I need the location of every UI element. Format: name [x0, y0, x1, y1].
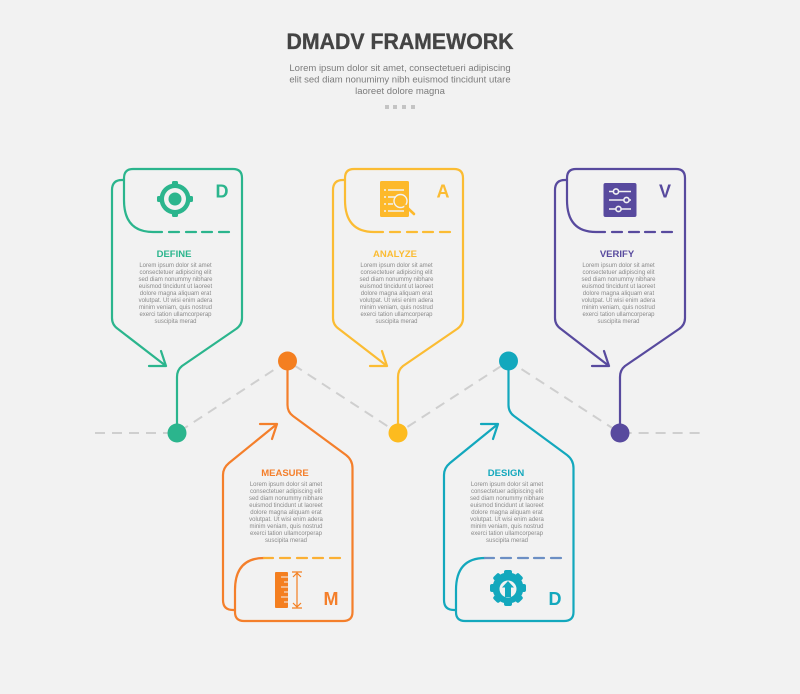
subtitle text block: elit sed diam nonumimy nibh euismod tincidunt utare — [289, 74, 511, 86]
panel: design — [444, 352, 574, 621]
icon: document with magnifier — [380, 181, 414, 217]
text block: design: volutpat. Ut wisi enim adera — [470, 517, 545, 523]
panel: verify — [555, 169, 685, 442]
dashes: design — [485, 557, 561, 559]
card outline: design — [444, 361, 574, 621]
text block: design: dolore magna aliquam erat — [471, 510, 543, 516]
title: DMADV FRAMEWORK — [286, 29, 514, 54]
card outline: verify — [555, 169, 685, 433]
card outline: measure — [223, 361, 352, 621]
heading: measure: MEASURE — [261, 468, 309, 479]
panel: measure — [223, 352, 352, 621]
text block: design: sed diam nonummy nibhare — [470, 496, 545, 502]
text block: define: euismod tincidunt ut laoreet — [139, 284, 213, 290]
text block: define: sed diam nonummy nibhare — [138, 277, 213, 283]
timeline dot: define — [168, 424, 186, 442]
text block: analyze: dolore magna aliquam erat — [361, 291, 433, 297]
text block: analyze: sed diam nonummy nibhare — [359, 277, 434, 283]
text block: analyze: Lorem ipsum dolor sit amet — [360, 263, 433, 269]
text block: verify: exerci tation ullamcorperap — [582, 312, 655, 318]
dashes: measure — [264, 557, 340, 559]
timeline dot: measure — [278, 352, 297, 370]
text block: define: volutpat. Ut wisi enim adera — [139, 298, 213, 304]
dashed timeline — [95, 361, 700, 433]
text block: verify: volutpat. Ut wisi enim adera — [582, 298, 656, 304]
text block: define: consectetuer adipiscing elit — [139, 270, 212, 276]
text block: measure: exerci tation ullamcorperap — [250, 531, 323, 537]
heading: design: DESIGN — [488, 468, 524, 479]
text block: verify: minim veniam, quis nostrud — [582, 305, 655, 311]
icon: ruler — [275, 572, 302, 608]
text block: verify: consectetuer adipiscing elit — [582, 270, 655, 276]
heading: analyze: ANALYZE — [373, 249, 417, 260]
text block: define: dolore magna aliquam erat — [140, 291, 212, 297]
text block: analyze: euismod tincidunt ut laoreet — [360, 284, 434, 290]
subtitle text block: Lorem ipsum dolor sit amet, consectetueri adipiscing — [289, 63, 511, 74]
icon: gear with up arrow — [490, 570, 526, 606]
text block: design: consectetuer adipiscing elit — [471, 489, 543, 495]
text block: measure: Lorem ipsum dolor sit amet — [250, 482, 323, 488]
text block: verify: suscipita merad — [597, 319, 640, 325]
text block: verify — [581, 263, 656, 325]
title dots — [385, 105, 415, 109]
text block: measure: euismod tincidunt ut laoreet — [249, 503, 323, 509]
subtitle text block — [289, 63, 511, 97]
text block: measure: minim veniam, quis nostrud — [249, 524, 323, 530]
timeline dot: design — [499, 352, 518, 370]
text block: analyze: minim veniam, quis nostrud — [360, 305, 433, 311]
text block: design: suscipita merad — [486, 538, 528, 544]
panel: analyze — [333, 169, 463, 442]
timeline dot: analyze — [388, 424, 408, 442]
text block: design: euismod tincidunt ut laoreet — [470, 503, 544, 509]
text block: measure: sed diam nonummy nibhare — [249, 496, 324, 502]
text block: verify: euismod tincidunt ut laoreet — [582, 284, 656, 290]
heading: verify: VERIFY — [600, 249, 635, 260]
panel: define — [112, 169, 242, 442]
text block: analyze: consectetuer adipiscing elit — [360, 270, 433, 276]
letter: A: A — [436, 182, 450, 202]
text block: design: exerci tation ullamcorperap — [471, 531, 544, 537]
text block: measure: consectetuer adipiscing elit — [250, 489, 322, 495]
text block: define — [138, 263, 213, 325]
text block: design: Lorem ipsum dolor sit amet — [471, 482, 544, 488]
letter: D: D — [216, 182, 228, 202]
heading: define: DEFINE — [157, 249, 191, 260]
text block: design — [470, 482, 545, 544]
text block: define: Lorem ipsum dolor sit amet — [139, 263, 212, 269]
text block: analyze: suscipita merad — [375, 319, 418, 325]
timeline dot: verify — [610, 424, 630, 442]
card outline: analyze — [333, 169, 463, 433]
text block: measure: suscipita merad — [265, 538, 307, 544]
letter: D: D — [548, 589, 562, 609]
text block: analyze — [359, 263, 434, 325]
letter: M: M — [324, 589, 338, 609]
text block: measure: dolore magna aliquam erat — [250, 510, 322, 516]
card outline: define — [112, 169, 242, 433]
icon: target — [157, 181, 193, 217]
text block: design: minim veniam, quis nostrud — [470, 524, 544, 530]
text block: define: suscipita merad — [154, 319, 197, 325]
letter: V: V — [659, 182, 671, 202]
text block: measure — [249, 482, 324, 544]
text block: verify: dolore magna aliquam erat — [583, 291, 655, 297]
text block: analyze: exerci tation ullamcorperap — [360, 312, 433, 318]
text block: measure: volutpat. Ut wisi enim adera — [249, 517, 324, 523]
text block: define: minim veniam, quis nostrud — [139, 305, 212, 311]
subtitle text block: laoreet dolore magna — [355, 86, 446, 97]
text block: verify: sed diam nonummy nibhare — [581, 277, 656, 283]
icon: sliders — [604, 183, 636, 217]
text block: analyze: volutpat. Ut wisi enim adera — [360, 298, 434, 304]
text block: define: exerci tation ullamcorperap — [139, 312, 212, 318]
text block: verify: Lorem ipsum dolor sit amet — [582, 263, 655, 269]
